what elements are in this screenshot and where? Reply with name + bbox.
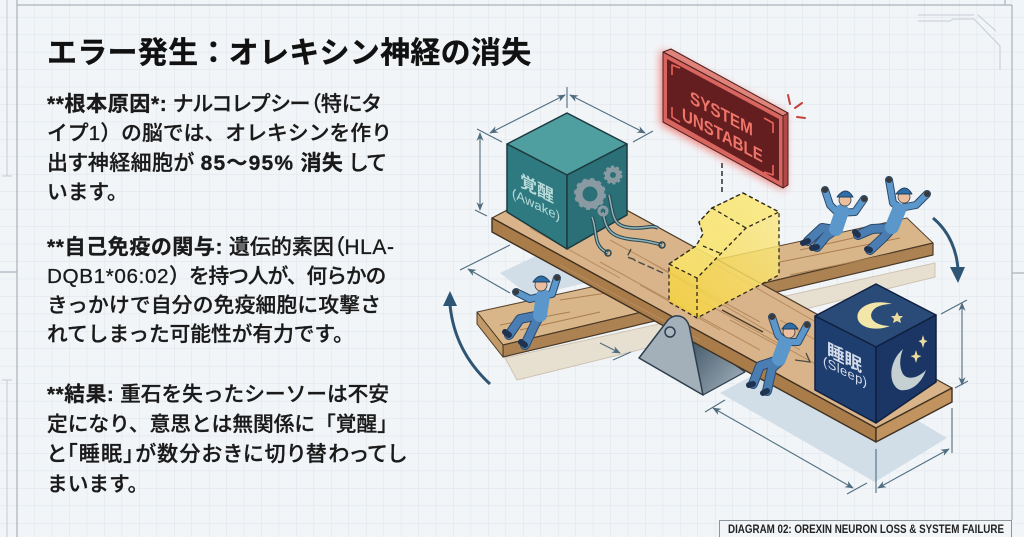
icon: gears and wires <box>576 166 665 256</box>
worker: on plank edge <box>749 317 807 393</box>
title: エラー発生：オレキシン神経の消失 <box>47 37 531 70</box>
text block: autoimmune: **自己免疫の関与: 遺伝的素因（HLA- <box>47 236 395 259</box>
floor shadows <box>500 254 947 482</box>
main seesaw plank <box>492 178 952 442</box>
icons: stars <box>891 312 928 363</box>
sign: system unstable <box>661 49 788 190</box>
cube: awake <box>507 113 627 249</box>
arrow on plank: right <box>795 353 810 362</box>
dimension lines <box>460 87 968 494</box>
text block: result: **結果: 重石を失ったシーソーは不安 <box>47 383 389 406</box>
label: sleep kanji: 睡眠 <box>827 335 862 378</box>
text block: result: 定になり、意思とは無関係に「覚醒」 <box>47 413 398 436</box>
worker: upper right <box>855 180 927 250</box>
tilted plank: unstable position <box>477 218 935 380</box>
text block: result: まいます。 <box>47 473 148 496</box>
text block: root cause: います。 <box>47 181 128 204</box>
label: awake kanji: 覚醒 <box>520 167 554 209</box>
worker: upper left <box>803 190 864 248</box>
text block: autoimmune: れてしまった可能性が有力です。 <box>47 323 354 346</box>
arrow: plank rising left <box>443 291 490 384</box>
worker: left sliding <box>505 276 557 345</box>
text block: autoimmune: DQB1*06:02）を持つ人が、何らかの <box>47 265 385 288</box>
yellow counterweight ghost <box>669 193 779 318</box>
text block: result: と「睡眠」が数分おきに切り替わってし <box>47 443 407 466</box>
text block: autoimmune: きっかけで自分の免疫細胞に攻撃さ <box>47 294 381 317</box>
label: awake english: (Awake) <box>512 186 560 224</box>
text block: root cause: **根本原因*: ナルコレプシー（特にタ <box>47 93 380 116</box>
fulcrum: front face <box>639 316 703 395</box>
text block: root cause: 出す神経細胞が 85～95% 消失 して <box>47 152 387 175</box>
sparks <box>788 95 805 118</box>
text block: autoimmune <box>46 236 395 346</box>
sign text line 2: UNSTABLE <box>682 104 763 167</box>
diagram caption box <box>720 520 1012 537</box>
text block: result <box>46 383 407 496</box>
sign text line 1: SYSTEM <box>690 87 753 140</box>
dashed line to sign <box>721 163 723 195</box>
icon: moon top <box>857 302 892 329</box>
cube: sleep <box>815 284 936 423</box>
arrow on plank: left <box>627 249 663 273</box>
arrow: plank falling right <box>933 218 965 283</box>
text block: root cause <box>46 92 392 204</box>
fulcrum: shaded side <box>686 322 745 395</box>
icon: moon side <box>891 349 926 390</box>
text block: root cause: イプ1）の脳では、オレキシンを作り <box>47 122 392 145</box>
label: sleep english: (Sleep) <box>823 354 867 390</box>
